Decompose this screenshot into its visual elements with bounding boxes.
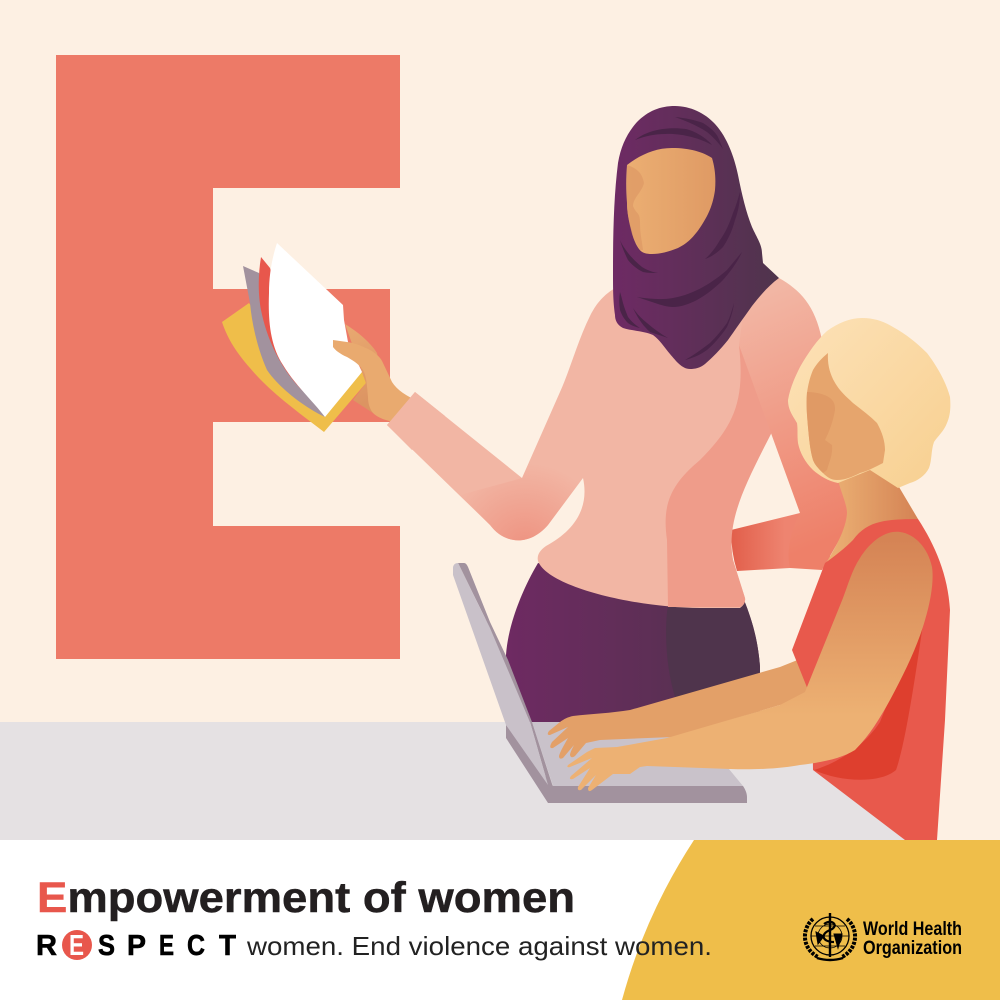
footer panel [0,840,1000,1000]
laptop [453,563,747,803]
hair [788,318,950,488]
skirt [505,563,760,722]
sleeve cuff [387,392,445,450]
back of hand [345,324,385,413]
hijab [613,106,779,369]
heading: Empowerment of women [37,874,575,922]
dress shadow [814,610,925,780]
documents [222,243,385,432]
skirt shadow [666,600,760,700]
WHO wordmark: World Health [863,919,962,940]
WHO wordmark [863,919,962,959]
seated woman [548,318,950,840]
WHO wordmark: Organization [863,938,962,959]
letter C: C [187,930,205,962]
red sheet [259,257,306,394]
face shading [627,165,644,250]
desk [0,722,905,840]
dress [792,519,950,840]
tagline: women. End violence against women. [246,931,712,961]
neck [825,460,918,565]
near arm and hand [567,532,933,791]
keyboard deck [532,722,743,786]
WHO logo [805,913,962,960]
upper arm sleeve [739,278,848,570]
screen edge [458,563,553,787]
letter P: P [127,930,146,962]
yellow sheet [222,303,366,432]
face [626,148,715,254]
white sheet [269,243,362,417]
grey sheet [243,266,325,417]
yellow footer shape [622,840,1000,1000]
sweater and front arm [387,275,770,608]
letter R: R [36,930,57,962]
WHO emblem [805,913,855,960]
elbow shading [460,392,595,540]
large letter E [56,55,400,659]
hand holding documents [333,340,420,430]
laptop base front [506,725,747,803]
letter S: S [98,930,115,962]
hijab folds [619,117,742,360]
circled letter E [62,930,92,962]
woman with hijab [222,106,848,722]
far arm and hand [548,655,825,759]
RESPECT wordmark [36,930,236,962]
sweater shaded side [666,345,773,607]
face [807,353,885,480]
face shading [807,392,835,473]
back forearm [731,513,830,571]
screen [453,563,548,785]
letter E: E [159,930,174,962]
letter T: T [219,930,236,962]
circled letter E: E [69,930,84,962]
